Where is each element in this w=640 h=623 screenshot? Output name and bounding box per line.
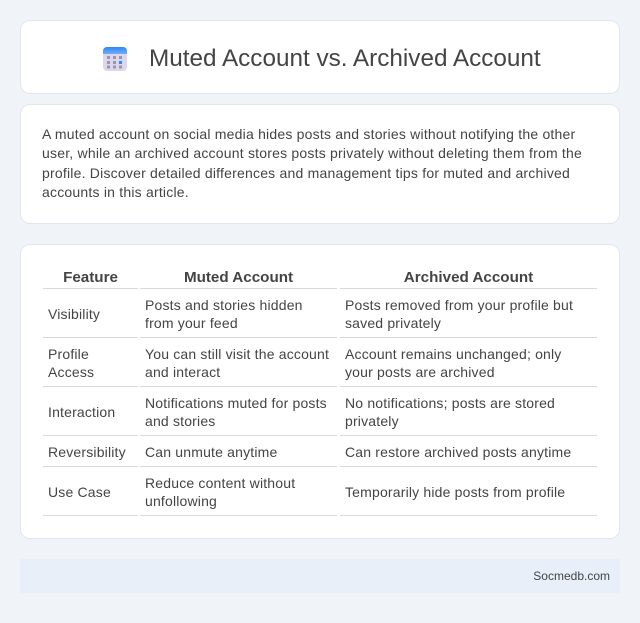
row: profile access: Account remains unchanged; only	[345, 346, 562, 362]
heading: Muted Account vs. Archived Account	[149, 45, 541, 72]
row: profile access: Profile	[48, 346, 89, 362]
text block: intro	[42, 126, 582, 200]
row: visibility: from your feed	[145, 315, 238, 331]
icon: calendar	[103, 47, 127, 71]
row: use case	[48, 475, 565, 509]
panel: title	[20, 20, 620, 94]
text block: intro: profile. Discover detailed differences and management tips for muted and archived	[42, 165, 570, 181]
row: use case: Reduce content without	[145, 475, 295, 491]
row: interaction: No notifications; posts are stored	[345, 395, 555, 411]
row: interaction: Interaction	[48, 404, 115, 420]
row: visibility: saved privately	[345, 315, 441, 331]
row: visibility: Posts removed from your profile but	[345, 297, 573, 313]
row: profile access: and interact	[145, 364, 220, 380]
text block: intro: user, while an archived account stores posts privately without deleting them from the	[42, 145, 582, 161]
row: visibility	[48, 297, 573, 331]
row: interaction: Notifications muted for posts	[145, 395, 327, 411]
row dividers	[43, 288, 597, 516]
text block: intro: A muted account on social media hides posts and stories without notifying the other	[42, 126, 575, 142]
row: use case: Use Case	[48, 484, 111, 500]
row: reversibility: Reversibility	[48, 444, 126, 460]
text block: intro: accounts in this article.	[42, 184, 189, 200]
row: profile access	[48, 346, 562, 380]
row: interaction: and stories	[145, 413, 215, 429]
footer text: Socmedb.com	[533, 569, 610, 583]
table header: Feature	[63, 269, 118, 286]
row: use case: Temporarily hide posts from profile	[345, 484, 565, 500]
footer bar	[20, 559, 620, 593]
row: profile access: You can still visit the account	[145, 346, 329, 362]
row: profile access: Access	[48, 364, 94, 380]
row: interaction	[48, 395, 555, 429]
row: reversibility: Can restore archived posts anytime	[345, 444, 571, 460]
table header: Muted Account	[184, 269, 293, 286]
panel: intro text	[20, 104, 620, 224]
row: visibility: Posts and stories hidden	[145, 297, 303, 313]
row: use case: unfollowing	[145, 493, 217, 509]
row: interaction: privately	[345, 413, 399, 429]
row: reversibility: Can unmute anytime	[145, 444, 277, 460]
row: profile access: your posts are archived	[345, 364, 495, 380]
row: reversibility	[48, 444, 571, 460]
table header: Archived Account	[404, 269, 533, 286]
table header	[63, 269, 533, 286]
row: visibility: Visibility	[48, 306, 100, 322]
panel: comparison table	[20, 244, 620, 539]
